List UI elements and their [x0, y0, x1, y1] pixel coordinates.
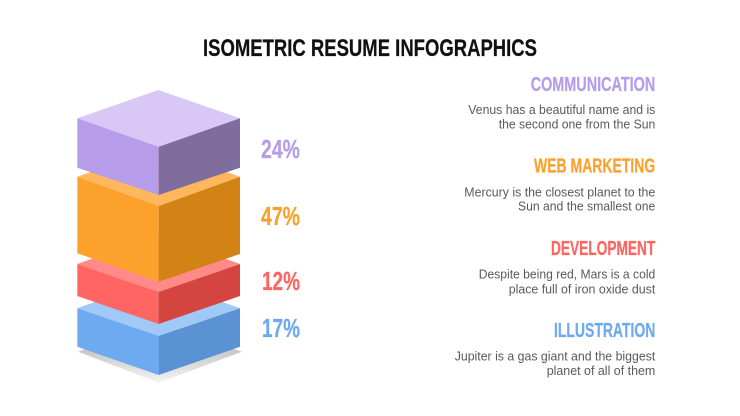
text: mars: place full of iron oxide dust — [509, 282, 656, 296]
text: mercury: Sun and the smallest one — [518, 200, 655, 214]
section: development — [479, 237, 656, 296]
block: purple 24% — [77, 90, 240, 195]
text: mars: Despite being red, Mars is a cold — [479, 268, 655, 282]
title: ISOMETRIC RESUME INFOGRAPHICS — [203, 35, 537, 62]
section: communication — [468, 73, 655, 131]
value: 12%: 12% — [262, 268, 300, 296]
value: 24%: 24% — [261, 136, 300, 164]
section: web marketing — [464, 154, 655, 214]
text: venus: Venus has a beautiful name and is — [468, 103, 655, 117]
value: 17%: 17% — [262, 315, 300, 343]
heading: development: DEVELOPMENT — [551, 237, 656, 260]
value: 47%: 47% — [261, 203, 300, 231]
text: mercury: Mercury is the closest planet to the — [464, 185, 655, 199]
heading: web marketing: WEB MARKETING — [534, 154, 655, 177]
text: venus: the second one from the Sun — [499, 117, 655, 131]
block: red 12% — [77, 235, 240, 324]
text: jupiter: Jupiter is a gas giant and the biggest — [455, 350, 656, 364]
heading: communication: COMMUNICATION — [531, 73, 655, 96]
heading: illustration: ILLUSTRATION — [554, 319, 655, 342]
block: blue 17% — [77, 279, 240, 375]
isometric stacked chart — [77, 90, 242, 383]
block: orange 47% — [77, 148, 240, 282]
text: jupiter: planet of all of them — [547, 364, 655, 378]
shadow — [78, 320, 242, 383]
section: illustration — [455, 319, 656, 378]
